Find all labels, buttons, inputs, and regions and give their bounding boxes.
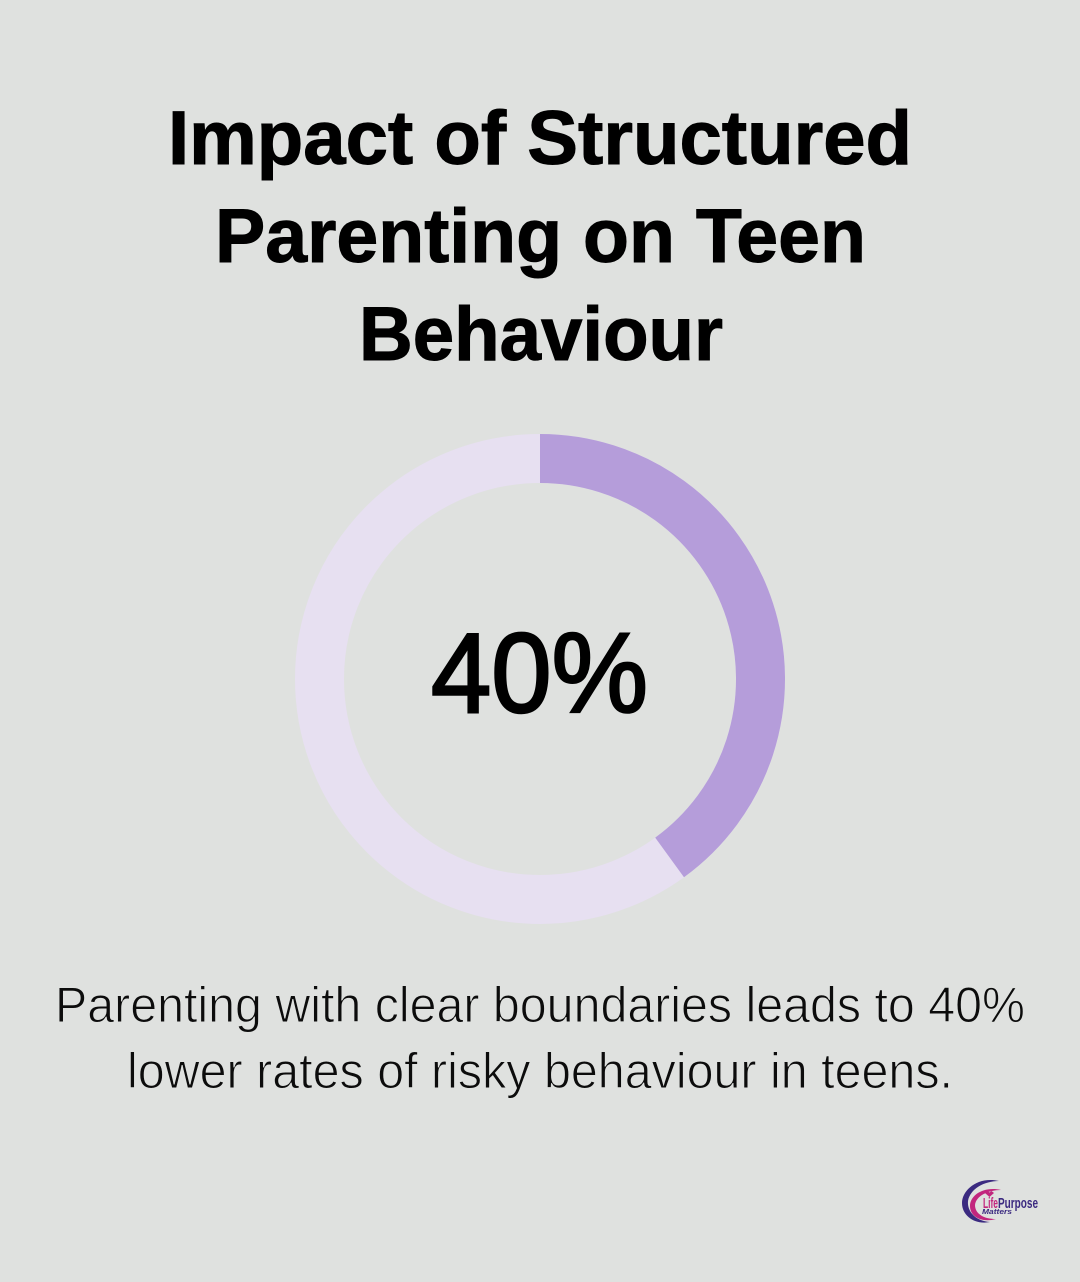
logo: Life Purpose Matters: Matters <box>982 1209 1012 1216</box>
donut value: 40% <box>431 610 648 736</box>
description text <box>55 977 1025 1099</box>
logo: Life Purpose Matters <box>962 1180 1038 1223</box>
title: Impact of Structured <box>168 96 912 181</box>
description text: Parenting with clear boundaries leads to 40% <box>55 977 1025 1033</box>
logo: Life Purpose Matters: Life <box>983 1195 998 1212</box>
description text: lower rates of risky behaviour in teens. <box>127 1043 953 1099</box>
donut chart: 40% <box>320 458 761 900</box>
title: Behaviour <box>359 292 723 377</box>
title <box>168 96 912 377</box>
logo: Life Purpose Matters: Purpose <box>998 1195 1038 1212</box>
title: Parenting on Teen <box>215 194 866 279</box>
